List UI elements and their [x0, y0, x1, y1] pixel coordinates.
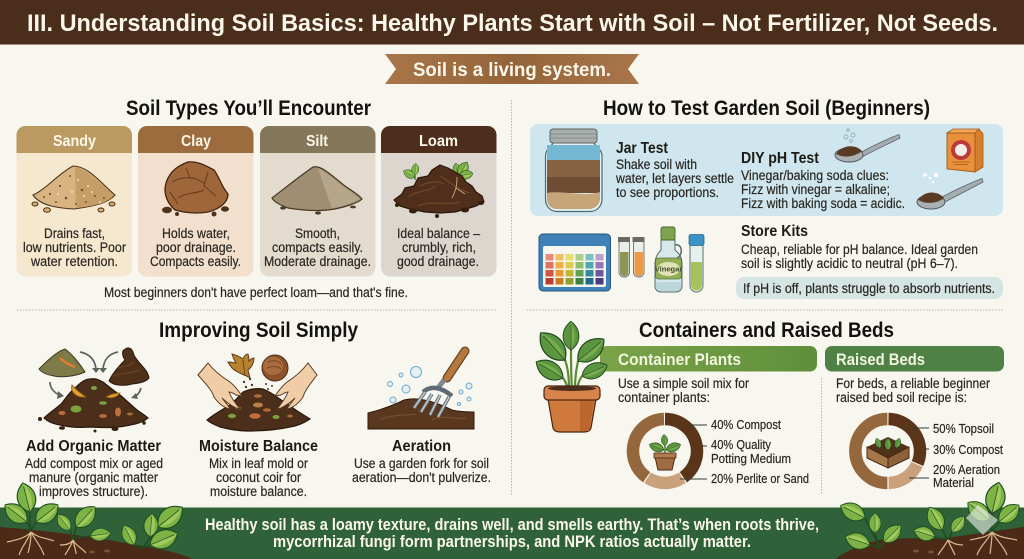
- icon: large test tube: [689, 234, 704, 292]
- text: aeration: Aeration: [392, 438, 451, 455]
- text: sandy description: water retention.: [30, 254, 118, 269]
- icon: second spoon: [917, 173, 983, 209]
- legend: container mix: 20% Perlite or Sand: [711, 471, 809, 486]
- text: DIY pH test: Vinegar/baking soda clues:: [741, 168, 889, 183]
- text: aeration: [352, 438, 491, 485]
- text: aeration: aeration—don't pulverize.: [352, 470, 491, 485]
- text: loam description: Ideal balance –: [397, 226, 480, 241]
- legend: container mix: Potting Medium: [711, 451, 791, 466]
- header band: [0, 0, 1024, 44]
- text: loam description: crumbly, rich,: [402, 240, 476, 255]
- card: silt: Silt: [306, 133, 329, 150]
- icon: loam pile with sprouts: [394, 160, 484, 218]
- text: moisture balance: [199, 438, 318, 499]
- blue test panel: [530, 124, 1003, 216]
- panel: soil testing: [530, 97, 1003, 299]
- panel: improving soil: [25, 319, 491, 499]
- heading: soil types: Soil Types You’ll Encounter: [126, 97, 371, 120]
- ribbon: soil is a living system: Soil is a living system.: [413, 59, 611, 81]
- text: sandy description: [23, 226, 126, 269]
- footer band: [0, 480, 1024, 559]
- text: DIY pH test: Fizz with baking soda = acidic.: [741, 196, 905, 211]
- text: sandy description: Drains fast,: [44, 226, 105, 241]
- text: raised bed intro: For beds, a reliable beginner: [836, 376, 990, 391]
- text: jar test: water, let layers settle: [615, 171, 734, 186]
- text: moisture balance: Moisture Balance: [199, 438, 318, 455]
- icon: clay clump: [162, 162, 229, 216]
- icon: baking soda box: [947, 129, 983, 172]
- footer text: [205, 516, 819, 551]
- icon: garden fork in soil: [368, 351, 474, 429]
- text: clay description: Holds water,: [162, 226, 230, 241]
- text: clay description: Compacts easily.: [150, 254, 241, 269]
- heading: test garden soil: How to Test Garden Soil (Beginners): [603, 97, 930, 120]
- text: loam description: [397, 226, 480, 269]
- icon: spoon with soil and bubbles: [835, 129, 900, 162]
- text: clay description: [150, 226, 241, 269]
- text: silt description: Smooth,: [295, 226, 340, 241]
- bar: container plants: Container Plants: [618, 350, 741, 369]
- text: container intro: container plants:: [618, 390, 710, 405]
- icon: compost pile: [38, 348, 149, 432]
- bar: container plants: [600, 346, 817, 372]
- text: DIY pH test: Fizz with vinegar = alkaline;: [741, 182, 890, 197]
- card: silt: [260, 126, 376, 276]
- note: beginners: Most beginners don't have perfect loam—and that's fine.: [104, 285, 408, 300]
- icon: small test tubes: [618, 237, 644, 277]
- text: sandy description: low nutrients. Poor: [23, 240, 126, 255]
- icon: small potted plant: [648, 434, 682, 470]
- chart: container mix donut: [633, 417, 809, 486]
- text: store kits: soil is slightly acidic to neutral (pH 6–7).: [741, 256, 958, 271]
- text: jar test: Jar Test: [616, 140, 669, 157]
- text: jar test: [615, 140, 734, 200]
- card: loam: [381, 126, 496, 276]
- heading: containers: Containers and Raised Beds: [639, 319, 894, 342]
- text: container intro: Use a simple soil mix for: [618, 376, 749, 391]
- text: moisture balance: coconut coir for: [216, 470, 301, 485]
- icon: jar: [546, 129, 602, 212]
- text: add organic matter: Add compost mix or aged: [25, 456, 163, 471]
- title: III. Understanding Soil Basics: Healthy Plants Start with Soil – Not Fertilizer, Not Seeds.: [27, 10, 998, 37]
- text: store kits: Cheap, reliable for pH balance. Ideal garden: [741, 242, 978, 257]
- card: sandy: [16, 126, 132, 276]
- text: DIY pH test: DIY pH Test: [741, 150, 820, 167]
- card: clay: [138, 126, 254, 276]
- text: silt description: compacts easily.: [272, 240, 363, 255]
- legend: raised bed mix: 50% Topsoil: [933, 421, 994, 436]
- legend: container mix: 40% Compost: [711, 417, 781, 432]
- legend: container mix: [711, 417, 809, 486]
- text: DIY pH test: [741, 150, 905, 211]
- text: raised bed intro: raised bed soil recipe is:: [836, 390, 967, 405]
- text: loam description: good drainage.: [397, 254, 479, 269]
- panel: soil types: [16, 97, 496, 300]
- footer: left soil and plants: [0, 481, 192, 559]
- text: add organic matter: [25, 438, 163, 499]
- text: raised bed intro: [836, 376, 990, 405]
- footer text: mycorrhizal fungi form partnerships, and NPK ratios actually matter.: [273, 533, 751, 551]
- icon: silt pile: [272, 167, 362, 215]
- text: silt description: [264, 226, 371, 269]
- legend: raised bed mix: 30% Compost: [933, 442, 1003, 457]
- callout: pH: If pH is off, plants struggle to absorb nutrients.: [743, 281, 995, 296]
- icon: potted plant: [532, 321, 610, 432]
- legend: raised bed mix: Material: [933, 475, 974, 490]
- ribbon: soil is a living system: [385, 54, 639, 84]
- text: add organic matter: manure (organic matter: [29, 470, 158, 485]
- text: aeration: Use a garden fork for soil: [354, 456, 489, 471]
- bar: raised beds: [825, 346, 1004, 372]
- icon: test kit card: [539, 234, 610, 291]
- text: add organic matter: Add Organic Matter: [26, 438, 161, 455]
- icon: hands mixing soil: [198, 354, 317, 431]
- icon: vinegar bottle: [655, 227, 682, 292]
- legend: container mix: 40% Quality: [711, 437, 771, 452]
- text: moisture balance: moisture balance.: [210, 484, 307, 499]
- callout: pH: [736, 277, 1003, 299]
- text: jar test: Shake soil with: [616, 157, 697, 172]
- text: clay description: poor drainage.: [156, 240, 236, 255]
- card: clay: Clay: [181, 133, 211, 150]
- panel: containers and raised beds: [532, 319, 1004, 490]
- icon: vinegar bottle: Vinegar: [655, 264, 682, 274]
- chart: raised bed mix donut: [855, 419, 1003, 490]
- heading: improving soil: Improving Soil Simply: [159, 319, 358, 342]
- text: container intro: [618, 376, 749, 405]
- text: silt description: Moderate drainage.: [264, 254, 371, 269]
- bar: raised beds: Raised Beds: [836, 350, 925, 369]
- legend: raised bed mix: 20% Aeration: [933, 462, 1000, 477]
- card: loam: Loam: [419, 133, 458, 150]
- text: store kits: Store Kits: [741, 223, 808, 240]
- icon: sand pile: [32, 166, 115, 212]
- icon: small raised bed: [867, 437, 909, 468]
- text: jar test: to see proportions.: [616, 185, 719, 200]
- text: store kits: [741, 223, 978, 271]
- legend: raised bed mix: [933, 421, 1003, 490]
- footer text: Healthy soil has a loamy texture, drains well, and smells earthy. That’s when roots thrive,: [205, 516, 819, 534]
- text: moisture balance: Mix in leaf mold or: [209, 456, 308, 471]
- footer: right soil and plants: [835, 480, 1024, 559]
- text: add organic matter: improves structure).: [39, 484, 148, 499]
- card: sandy: Sandy: [53, 133, 96, 150]
